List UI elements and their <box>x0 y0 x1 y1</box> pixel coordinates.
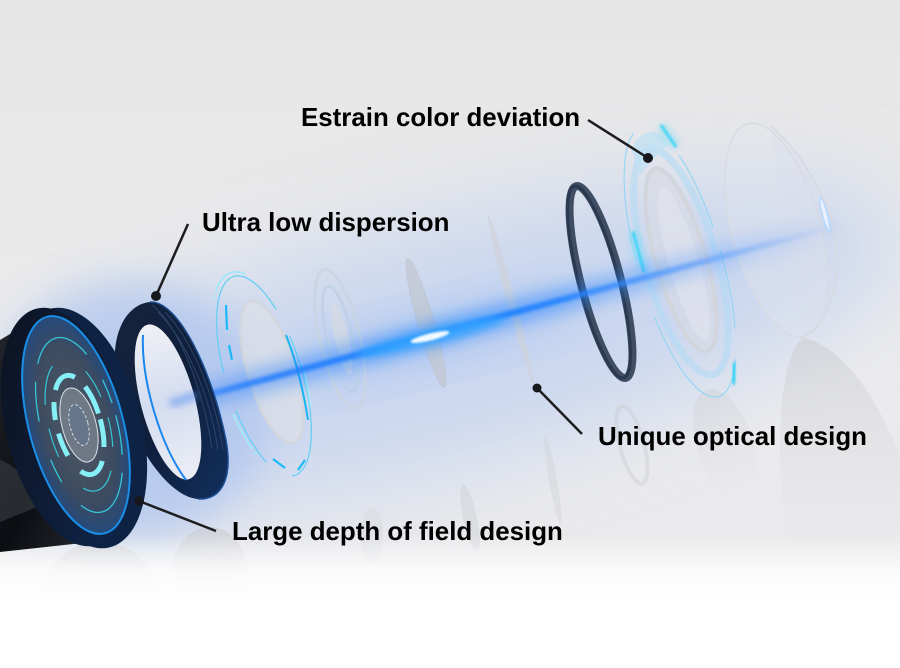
light beam <box>140 222 850 413</box>
lens face with holographic rings <box>19 328 139 522</box>
callout: Large depth of field design <box>134 496 563 546</box>
threaded retaining ring <box>115 302 228 499</box>
lens element: large dome lens <box>705 112 847 348</box>
lens element: holographic ring left <box>192 261 332 487</box>
bright focal spot <box>352 310 508 364</box>
lens element: small holographic ring <box>305 265 375 413</box>
front lens barrel <box>0 294 170 562</box>
callout: Estrain color deviation <box>301 104 653 163</box>
callout: Ultra low dispersion: Ultra low dispersion <box>202 209 449 237</box>
lens element: small disc <box>400 256 452 390</box>
lens element: thin dark ring <box>555 181 645 383</box>
faded lower edge <box>0 535 900 600</box>
reflections of lenses on the floor <box>45 338 900 642</box>
blue haze around light beam <box>0 115 900 575</box>
callout: Unique optical design: Unique optical design <box>598 423 867 451</box>
lens element: holographic ring upper right <box>601 116 759 408</box>
callout: Ultra low dispersion <box>151 209 449 301</box>
callout: Large depth of field design: Large depth of field design <box>232 518 563 546</box>
callout: Unique optical design <box>532 384 867 451</box>
lens element: thin disc <box>485 215 537 385</box>
callout: Estrain color deviation: Estrain color deviation <box>301 104 580 132</box>
